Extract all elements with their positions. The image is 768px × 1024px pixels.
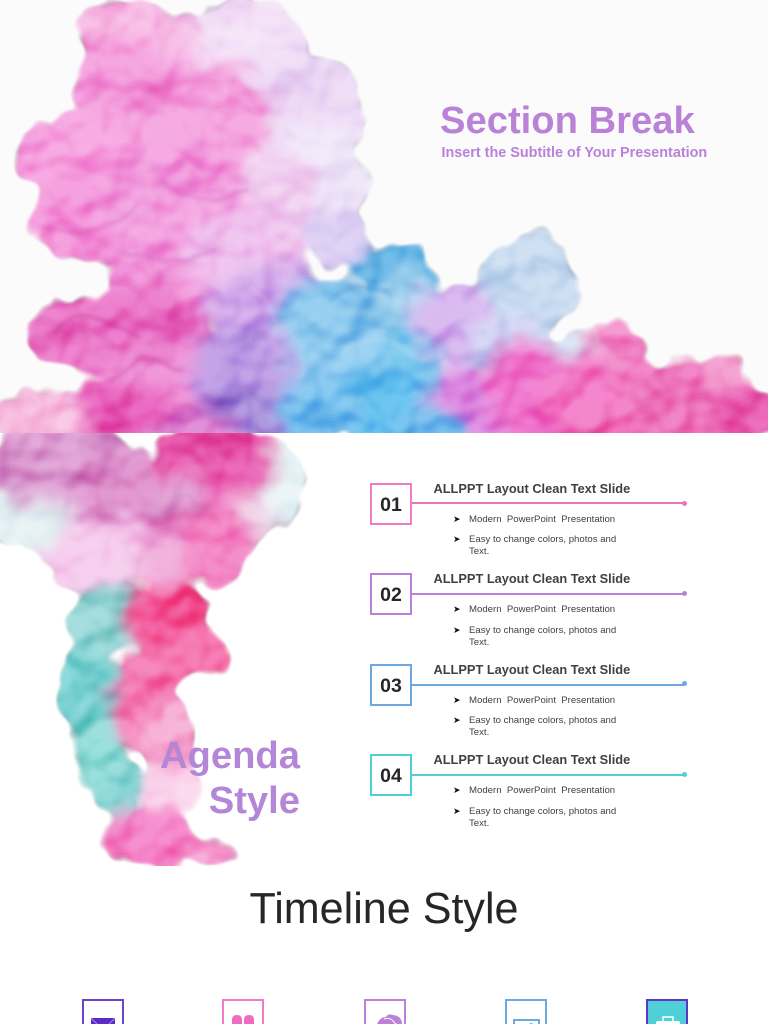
item heading 03: ALLPPT Layout Clean Text Slide — [434, 662, 630, 677]
heading: Agenda Style: Agenda — [160, 734, 300, 777]
heading: Agenda Style — [160, 734, 300, 822]
agenda item 01 — [370, 481, 687, 556]
bullet 04b: ➤ — [453, 806, 461, 816]
bullet 04a: ➤ — [453, 785, 461, 795]
icon: cloud — [364, 999, 406, 1024]
title: Timeline Style: Timeline Style — [249, 885, 519, 933]
bullet 03b: Text. — [469, 726, 489, 738]
bullet 01b — [453, 534, 616, 556]
magenta right — [425, 372, 515, 448]
bullet 01a: ➤ — [453, 514, 461, 524]
pink body — [83, 0, 167, 64]
icon: picture — [505, 999, 547, 1024]
subtitle: Insert the Subtitle of Your Presentation — [442, 145, 707, 161]
connector 03 — [412, 684, 685, 686]
bullet 04b: Text. — [469, 818, 489, 828]
lavender plume — [185, 0, 305, 90]
bullet 01b: Text. — [469, 546, 489, 556]
bullet 02b: Text. — [469, 636, 489, 648]
smoke fold details — [40, 31, 635, 380]
item heading 02: ALLPPT Layout Clean Text Slide — [434, 571, 630, 586]
bullet 03b — [453, 715, 616, 738]
number box 01: 01 — [380, 494, 402, 516]
bullet 04b: Easy to change colors, photos and — [469, 806, 616, 817]
connector 01 — [412, 502, 685, 504]
number box 04 — [370, 754, 412, 796]
bullet 02b: Easy to change colors, photos and — [469, 625, 616, 636]
bullet 03b: Easy to change colors, photos and — [469, 715, 616, 726]
number box 03 — [370, 664, 412, 706]
connector 02 — [412, 593, 685, 595]
bullet 02a: ➤ — [453, 604, 461, 614]
icon: envelope — [82, 999, 124, 1024]
bullet 02a: Modern PowerPoint Presentation — [469, 604, 615, 615]
dot 01 — [682, 500, 687, 506]
dot 04 — [682, 772, 687, 776]
item heading 04: ALLPPT Layout Clean Text Slide — [434, 752, 630, 767]
title: Section Break: Section Break — [440, 99, 695, 142]
photo: section break smoke — [0, 0, 768, 433]
bullet 04a: Modern PowerPoint Presentation — [469, 785, 615, 796]
bullet 01b: ➤ — [453, 534, 461, 544]
heading: Agenda Style: Style — [209, 779, 300, 822]
bullet 02b: ➤ — [453, 625, 461, 635]
number box 04: 04 — [380, 765, 402, 787]
number box 03: 03 — [380, 675, 402, 697]
bullet 01b: Easy to change colors, photos and — [469, 534, 616, 545]
bullet 04b — [453, 806, 616, 828]
blue cloud — [275, 283, 375, 347]
bullet 03b: ➤ — [453, 715, 461, 725]
dot 03 — [682, 681, 687, 686]
connector 04 — [412, 774, 685, 776]
icon: book — [222, 999, 264, 1024]
number box 02: 02 — [380, 584, 402, 606]
agenda item 03 — [370, 662, 687, 738]
photo: agenda smoke — [0, 433, 308, 866]
number box 02 — [370, 573, 412, 615]
bullet 03a: ➤ — [453, 695, 461, 705]
dot 02 — [682, 591, 687, 596]
number box 01 — [370, 483, 412, 525]
bullet 01a: Modern PowerPoint Presentation — [469, 514, 615, 525]
item heading 01: ALLPPT Layout Clean Text Slide — [434, 481, 630, 496]
bullet 03a: Modern PowerPoint Presentation — [469, 695, 615, 706]
lavender and pale blue right — [413, 285, 497, 365]
agenda item 02 — [370, 571, 687, 648]
bullet 02b — [453, 625, 616, 648]
icon: camera — [646, 999, 688, 1024]
